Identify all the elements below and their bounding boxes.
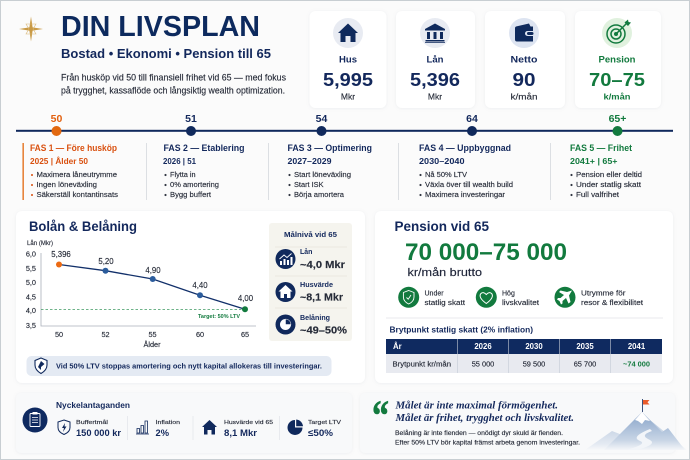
phase 2 (146, 143, 244, 200)
assumption: inflation: Inflation (156, 420, 180, 426)
quote text (394, 400, 574, 424)
header (19, 11, 286, 96)
timeline marker: 54 (316, 113, 327, 136)
intro text (61, 72, 286, 96)
illustration: mountain with flag (585, 399, 687, 450)
assumption: husvärde vid 65: 8,1 Mkr (224, 428, 257, 439)
phase 1: FAS 1 — Före husköp (30, 143, 118, 153)
benefit: under statlig skatt (398, 287, 465, 308)
assumption: target LTV (288, 420, 341, 439)
metric: Lån: Lån (300, 248, 312, 256)
phase 2: Bygg buffert (170, 190, 211, 199)
supporting text (395, 429, 580, 446)
KPI card: Hus: Hus (339, 54, 357, 64)
assumption: target LTV: Target LTV (308, 420, 341, 426)
icon: target (607, 23, 627, 43)
icon: house (338, 24, 358, 42)
quote mark: “ (372, 394, 389, 440)
pension unit: kr/mån brutto (408, 267, 482, 279)
line chart: 6,0 (26, 250, 36, 258)
assumption: husvärde vid 65: Husvärde vid 65 (224, 420, 273, 426)
metric: Lån (276, 248, 345, 271)
panel: Målnivå vid 65: Målnivå vid 65 (284, 230, 337, 239)
callout: LTV rule: Vid 50% LTV stoppas amortering och nytt kapital allokeras till investeringar. (56, 362, 322, 370)
panel: Nyckelantaganden (16, 393, 352, 453)
pension amount: 70 000–75 000 (405, 239, 567, 266)
KPI card: Hus (310, 11, 386, 108)
timeline marker: 65+ (609, 113, 626, 136)
timeline marker: 64 (466, 113, 478, 136)
panel: quote (360, 393, 687, 453)
table: brytpunkt: 65 700 (574, 359, 596, 368)
icon: clipboard (22, 408, 48, 432)
metric: Husvärde: Husvärde (300, 282, 333, 289)
line chart: Lån (Mkr) (27, 239, 53, 247)
metric: Belåning: Belåning (300, 314, 330, 322)
benefit: resor och flexibilitet: resor & flexibilitet (581, 300, 643, 307)
assumption: target LTV: ≤50% (308, 428, 334, 439)
metric: Belåning (276, 314, 348, 336)
KPI card: Netto: Netto (510, 54, 538, 64)
KPI card: Lån (396, 11, 475, 108)
line chart: Ålder (143, 340, 161, 349)
phase 5: Under statlig skatt (576, 180, 641, 189)
line chart: 4,90 (145, 266, 161, 275)
phase 3: FAS 3 — Optimering (288, 143, 372, 153)
intro text: Från husköp vid 50 till finansiell frihet vid 65 — med fokus (61, 72, 286, 82)
assumption: husvärde vid 65 (202, 420, 273, 439)
KPI card: Hus: Mkr (341, 92, 355, 102)
phase 1: Ingen löneväxling (36, 180, 97, 189)
table: brytpunkt: 2041 (628, 342, 646, 351)
icon: bank (425, 24, 445, 43)
phase 2: 0% amortering (170, 180, 219, 189)
line chart: 4,40 (192, 281, 208, 290)
quote text: Målet är inte maximal förmögenhet. (394, 400, 558, 412)
phase 5: 2041+ | 65+ (570, 156, 618, 166)
benefit: hög livskvalitet: livskvalitet (502, 300, 539, 307)
phase 1: Maximera låneutrymme (36, 170, 117, 179)
title: DIN LIVSPLAN (61, 11, 260, 43)
line chart: Target: 50% LTV (198, 314, 240, 320)
phase 1: Säkerställ kontantinsats (36, 190, 118, 199)
table heading: Brytpunkt statlig skatt (2% inflation) (390, 326, 533, 335)
KPI card: Netto: 90 (512, 69, 536, 90)
timeline marker: 50 (51, 113, 62, 136)
benefit: resor och flexibilitet: Utrymme för (581, 291, 626, 298)
phase 1 (22, 143, 118, 200)
phase 3: Start löneväxling (294, 170, 351, 179)
assumption: inflation: 2% (156, 428, 170, 439)
assumption: buffertmål: 150 000 kr (76, 428, 121, 439)
heading: Nyckelantaganden (56, 401, 130, 410)
benefit: hög livskvalitet: Hög (502, 291, 515, 298)
line chart: 55 (148, 330, 157, 339)
quote text: Målet är frihet, trygghet och livskvalitet. (394, 413, 574, 424)
phase 4: Växla över till wealth build (425, 180, 513, 189)
line chart: 5,5 (26, 264, 36, 273)
phase 4 (398, 143, 513, 200)
intro text: på trygghet, kassaflöde och långsiktig wealth optimization. (61, 86, 285, 96)
timeline (16, 113, 673, 136)
line chart: 5,0 (26, 278, 36, 287)
line chart: 4,00 (238, 294, 254, 303)
line chart: 5,20 (98, 257, 114, 266)
KPI card: Lån: Lån (426, 54, 444, 64)
line chart: 5,396 (51, 250, 71, 259)
heading: Pension vid 65 (394, 219, 489, 234)
KPI card: Lån: 5,396 (410, 69, 460, 90)
phase 5: Full valfrihet (576, 190, 619, 199)
phase 2: 2026 | 51 (163, 156, 196, 166)
timeline marker: 64: 64 (466, 113, 478, 125)
table: brytpunkt: Brytpunkt kr/mån (392, 359, 451, 368)
benefit: resor och flexibilitet (554, 287, 643, 308)
timeline marker: 50: 50 (51, 113, 62, 125)
metric: Husvärde: ~8,1 Mkr (300, 292, 343, 304)
table: brytpunkt: 2026 (474, 342, 492, 351)
table: brytpunkt: ~74 000 (623, 359, 650, 368)
line chart: 50 (55, 330, 63, 339)
phase 3: 2027–2029 (288, 156, 332, 166)
supporting text: Efter 50% LTV bör kapital främst arbeta genom investeringar. (395, 440, 580, 446)
phase 5 (550, 143, 642, 200)
KPI card: Pension (575, 11, 661, 108)
icon: wallet (515, 24, 533, 42)
benefit: under statlig skatt: statlig skatt (424, 300, 465, 307)
table: brytpunkt: 55 000 (472, 359, 494, 368)
KPI card: Netto: k/mån (510, 92, 538, 102)
line chart (26, 239, 256, 349)
phase 3 (268, 143, 372, 200)
line chart: 4,5 (26, 292, 36, 302)
phase 4: FAS 4 — Uppbyggnad (419, 143, 511, 153)
line chart: 65 (241, 330, 249, 339)
callout: LTV rule (26, 356, 332, 376)
line chart: 60 (196, 330, 204, 339)
benefit: under statlig skatt: Under (424, 291, 444, 298)
table: brytpunkt: 59 500 (523, 359, 545, 368)
timeline marker: 51: 51 (185, 113, 197, 125)
table: brytpunkt (386, 339, 662, 373)
phase 4: 2030–2040 (419, 156, 465, 166)
table: brytpunkt: År (393, 342, 402, 351)
subtitle: Bostad • Ekonomi • Pension till 65 (61, 46, 271, 61)
table: brytpunkt: 2035 (576, 342, 594, 351)
heading: Bolån & Belåning (29, 219, 137, 234)
KPI card: Hus: 5,995 (323, 69, 373, 90)
assumption: inflation (136, 420, 180, 439)
metric: Belåning: ~49–50% (300, 324, 348, 336)
table: brytpunkt: 2030 (525, 342, 543, 351)
KPI card: Pension: Pension (598, 54, 636, 64)
phase 3: Start ISK (294, 180, 324, 189)
panel: Pension vid 65 (375, 211, 673, 383)
panel: Målnivå vid 65 (269, 223, 352, 341)
timeline marker: 65+: 65+ (609, 113, 626, 125)
line chart: 52 (101, 330, 110, 339)
phase 1: 2025 | Ålder 50 (30, 156, 88, 166)
phase 2: FAS 2 — Etablering (164, 143, 244, 153)
phase 2: Flytta in (170, 170, 196, 179)
metric: Lån: ~4,0 Mkr (300, 259, 345, 271)
timeline marker: 51 (185, 113, 197, 136)
line chart: 4,0 (26, 306, 36, 315)
phase 4: Nå 50% LTV (425, 170, 467, 179)
phase 5: Pension eller deltid (576, 170, 642, 179)
KPI card: Netto (485, 11, 565, 108)
assumption: buffertmål: Buffertmål (76, 419, 108, 426)
assumption: buffertmål (58, 419, 121, 439)
KPI card: Pension: k/mån (604, 92, 630, 102)
phase 5: FAS 5 — Frihet (570, 143, 632, 153)
icon: compass star (19, 16, 43, 42)
benefit: hög livskvalitet (476, 287, 539, 308)
panel: Bolån & Belåning (16, 211, 365, 383)
phase 4: Maximera investeringar (425, 190, 506, 199)
KPI card: Pension: 70–75 (589, 69, 645, 90)
phase 3: Börja amortera (294, 190, 344, 199)
supporting text: Belåning är inte fienden — onödigt dyr skuld är fienden. (395, 429, 563, 437)
KPI card: Lån: Mkr (428, 92, 442, 102)
metric: Husvärde (276, 282, 343, 304)
timeline marker: 54: 54 (316, 113, 327, 125)
line chart: 3,5 (26, 321, 36, 330)
